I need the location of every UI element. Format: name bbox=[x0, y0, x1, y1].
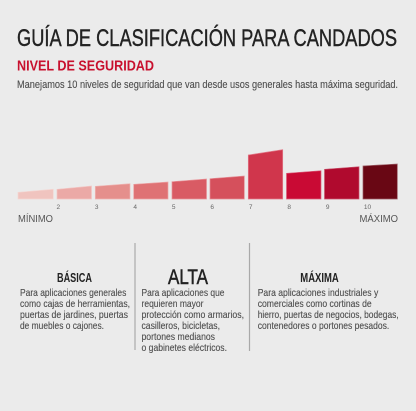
body text: alta: portones medianos bbox=[142, 331, 215, 343]
body text: básica: de muebles o cajones. bbox=[20, 320, 104, 332]
bar level 7 bbox=[248, 150, 283, 199]
axis numbers: 3 bbox=[95, 204, 99, 211]
axis numbers: 10 bbox=[364, 204, 371, 211]
body text: básica: puertas de jardines, puertas bbox=[20, 309, 128, 321]
bar level 6 bbox=[210, 176, 244, 199]
body text: básica: como cajas de herramientas, bbox=[20, 298, 130, 310]
panel: básica bbox=[20, 270, 130, 332]
bar level 3 bbox=[95, 184, 130, 199]
axis numbers: 7 bbox=[249, 204, 253, 211]
body text: alta: Para aplicaciones que bbox=[142, 287, 225, 299]
axis numbers: 6 bbox=[210, 204, 214, 211]
heading: máxima: MÁXIMA bbox=[300, 270, 339, 285]
label: maximum: MÁXIMO bbox=[360, 212, 398, 225]
body text: máxima bbox=[258, 287, 399, 332]
label: minimum: MÍNIMO bbox=[18, 212, 53, 225]
body text: básica: Para aplicaciones generales bbox=[20, 287, 126, 299]
body text: alta bbox=[142, 287, 244, 354]
subtitle: NIVEL DE SEGURIDAD bbox=[17, 58, 154, 74]
bar level 2 bbox=[57, 186, 92, 199]
bar level 9 bbox=[324, 167, 359, 199]
body text: máxima: contenedores o portones pesados. bbox=[258, 320, 389, 332]
body text: alta: o gabinetes eléctricos. bbox=[142, 342, 227, 354]
bar chart: security levels bbox=[18, 150, 397, 199]
axis numbers: 8 bbox=[287, 204, 291, 211]
body text: máxima: Para aplicaciones industriales y bbox=[258, 287, 379, 299]
panel: alta bbox=[142, 265, 244, 354]
bar level 5 bbox=[172, 179, 206, 199]
heading: básica: BÁSICA bbox=[57, 270, 92, 285]
bar level 1 bbox=[18, 189, 53, 199]
axis numbers: 2 bbox=[56, 204, 60, 211]
body text: máxima: comerciales como cortinas de bbox=[258, 298, 372, 310]
axis numbers: 9 bbox=[326, 204, 330, 211]
axis numbers: 5 bbox=[172, 204, 176, 211]
body text: alta: requieren mayor bbox=[142, 298, 204, 310]
bar level 8 bbox=[286, 171, 321, 199]
axis numbers: 4 bbox=[133, 204, 137, 211]
bar level 10 bbox=[363, 164, 397, 199]
body text: básica bbox=[20, 287, 130, 332]
bar level 4 bbox=[134, 182, 168, 199]
panel: máxima bbox=[258, 270, 399, 332]
body text: alta: casilleros, bicicletas, bbox=[142, 320, 220, 332]
body text: alta: protección como armarios, bbox=[142, 309, 244, 321]
heading: alta: ALTA bbox=[168, 265, 209, 289]
axis numbers bbox=[56, 204, 371, 211]
